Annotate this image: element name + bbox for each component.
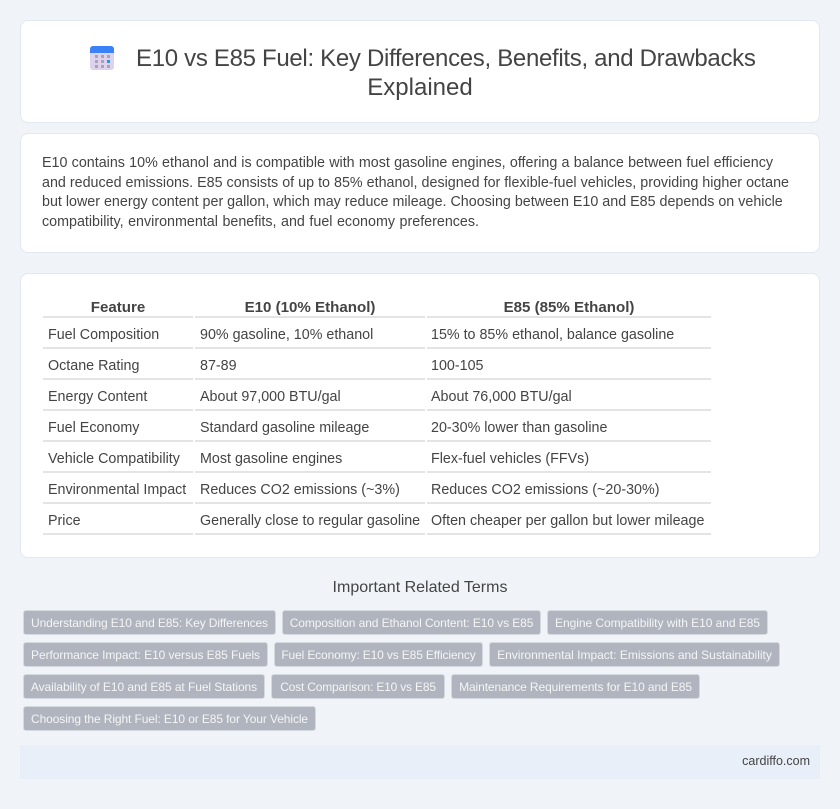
related terms tags: Cost Comparison: E10 vs E85	[280, 680, 436, 694]
related terms tags: Fuel Economy: E10 vs E85 Efficiency	[281, 648, 476, 662]
footer bar	[20, 745, 820, 779]
comparison table: Flex-fuel vehicles (FFVs)	[431, 451, 589, 467]
comparison table: Reduces CO2 emissions (~3%)	[200, 482, 400, 498]
comparison table: Price	[48, 513, 81, 529]
comparison table: Most gasoline engines	[200, 451, 342, 467]
related terms tags: Composition and Ethanol Content: E10 vs E85	[290, 616, 533, 630]
comparison table: 100-105	[431, 358, 483, 374]
comparison table: 90% gasoline, 10% ethanol	[200, 327, 373, 343]
comparison table: 87-89	[200, 358, 237, 374]
comparison table: Environmental Impact	[48, 482, 186, 498]
comparison table: Often cheaper per gallon but lower mileage	[431, 513, 704, 529]
comparison table	[43, 299, 711, 535]
title	[136, 45, 756, 101]
comparison table: E85 (85% Ethanol)	[504, 299, 634, 316]
comparison table: About 97,000 BTU/gal	[200, 389, 341, 405]
comparison table: 15% to 85% ethanol, balance gasoline	[431, 327, 674, 343]
related terms tags: Choosing the Right Fuel: E10 or E85 for Your Vehicle	[31, 712, 308, 726]
comparison table: Feature	[91, 299, 145, 316]
comparison table: 20-30% lower than gasoline	[431, 420, 607, 436]
comparison table: Energy Content	[48, 389, 147, 405]
comparison table: Generally close to regular gasoline	[200, 513, 420, 529]
comparison table: About 76,000 BTU/gal	[431, 389, 572, 405]
table card	[20, 273, 820, 558]
related terms tags: Engine Compatibility with E10 and E85	[555, 616, 760, 630]
comparison table: Reduces CO2 emissions (~20-30%)	[431, 482, 659, 498]
comparison table: E10 (10% Ethanol)	[245, 299, 375, 316]
comparison table: Octane Rating	[48, 358, 139, 374]
related terms heading: Important Related Terms	[333, 579, 507, 596]
title: Explained	[367, 74, 473, 101]
intro card	[20, 133, 820, 253]
intro text: compatibility, environmental benefits, and fuel economy preferences.	[42, 214, 479, 230]
related terms tags: Environmental Impact: Emissions and Sustainability	[497, 648, 772, 662]
title: E10 vs E85 Fuel: Key Differences, Benefits, and Drawbacks	[136, 45, 756, 72]
intro text	[42, 155, 789, 230]
footer text: cardiffo.com	[742, 754, 810, 768]
comparison table: Fuel Composition	[48, 327, 159, 343]
related terms tags: Availability of E10 and E85 at Fuel Stations	[31, 680, 257, 694]
intro text: E10 contains 10% ethanol and is compatible with most gasoline engines, offering a balance between fuel efficiency	[42, 155, 773, 171]
related terms tags: Maintenance Requirements for E10 and E85	[459, 680, 692, 694]
intro text: but lower energy content per gallon, which may reduce mileage. Choosing between E10 and E85 depends on vehicle	[42, 194, 783, 210]
related terms tags: Performance Impact: E10 versus E85 Fuels	[31, 648, 260, 662]
comparison table: Fuel Economy	[48, 420, 139, 436]
comparison table: Vehicle Compatibility	[48, 451, 180, 467]
icon: calendar	[90, 46, 114, 70]
intro text: and reduced emissions. E85 consists of up to 85% ethanol, designed for flexible-fuel vehicles, providing higher octane	[42, 175, 789, 191]
comparison table: Standard gasoline mileage	[200, 420, 369, 436]
header card	[20, 20, 820, 123]
related terms tags: Understanding E10 and E85: Key Differences	[31, 616, 268, 630]
